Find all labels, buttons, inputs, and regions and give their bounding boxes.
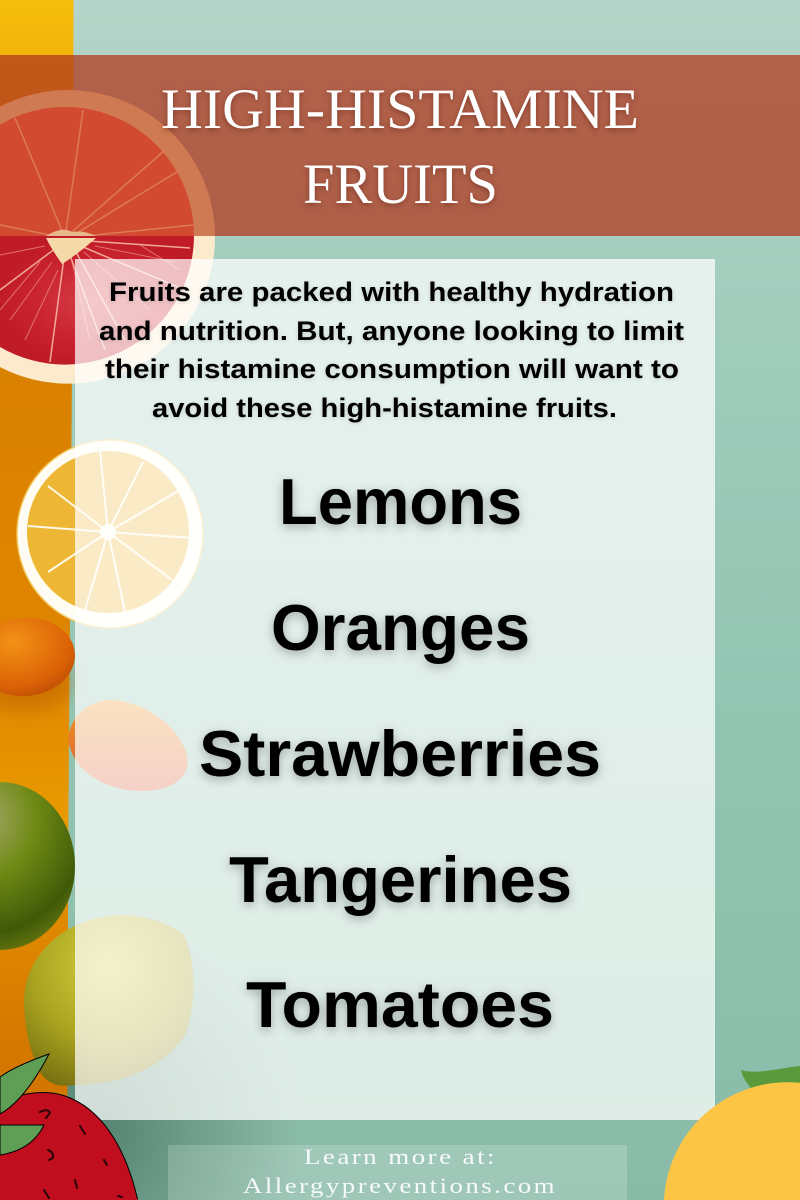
fruit: lime — [0, 782, 75, 950]
title: FRUITS — [303, 153, 498, 216]
fruit: lemon slice — [17, 440, 203, 628]
footer box: Allergypreventions.com — [243, 1173, 557, 1198]
fruit list: Strawberries — [199, 717, 601, 790]
intro text — [99, 277, 684, 423]
fruit list: Tangerines — [229, 843, 572, 916]
fruit: green lemon — [24, 915, 194, 1086]
intro text: their histamine consumption will want to — [105, 354, 679, 384]
title — [161, 78, 639, 216]
intro text: Fruits are packed with healthy hydration — [109, 277, 674, 307]
icon: mango — [664, 1066, 800, 1200]
intro text: and nutrition. But, anyone looking to limit — [99, 316, 684, 346]
fruit list: Tomatoes — [246, 968, 554, 1041]
icon: strawberry — [0, 1054, 138, 1200]
fruit: grapefruit upper half — [0, 90, 215, 236]
footer box — [168, 1144, 627, 1200]
fruit: grapefruit lower half — [0, 236, 215, 384]
intro text: avoid these high-histamine fruits. — [152, 393, 617, 423]
fruit list: Oranges — [271, 591, 530, 664]
footer box: Learn more at: — [304, 1144, 497, 1169]
title: HIGH-HISTAMINE — [161, 78, 639, 141]
orange strip — [0, 0, 74, 1200]
panel backdrop — [75, 259, 715, 1120]
title band — [0, 55, 800, 236]
fruit list: Lemons — [279, 465, 522, 538]
fruit: second kumquat — [68, 700, 188, 791]
fruit: kumquat — [0, 614, 78, 712]
fruit list — [199, 465, 601, 1041]
